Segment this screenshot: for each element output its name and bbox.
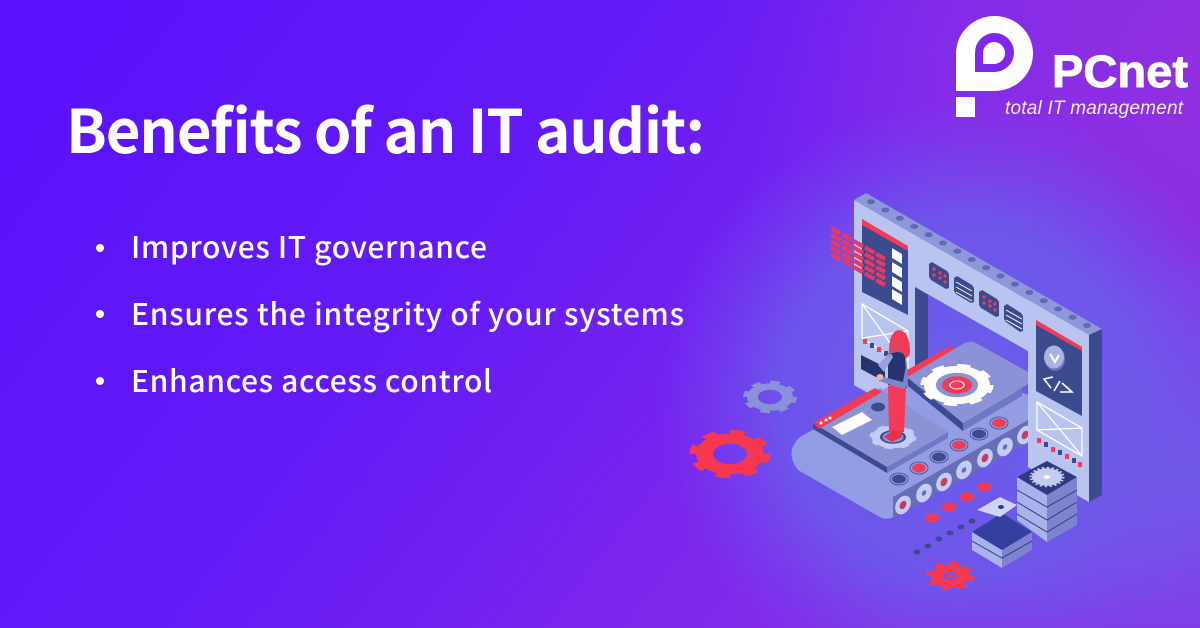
code glyph [1044, 377, 1072, 392]
bullet: ensures integrity: Ensures the integrity of your systems [131, 290, 684, 334]
panel white keys [892, 248, 902, 305]
gear: red large [694, 432, 766, 476]
module: red dots A [929, 262, 949, 289]
illustration: IT audit machine [694, 193, 1102, 589]
opening inner wall [915, 287, 928, 368]
platform: large gear [907, 342, 1028, 431]
frame rivets [867, 199, 1091, 328]
face [890, 339, 902, 353]
logo tagline: total IT management [1005, 98, 1184, 119]
right arm [879, 360, 908, 389]
white gear [924, 366, 990, 404]
shoes [884, 431, 902, 442]
hand [876, 374, 884, 380]
navy path dots [914, 518, 976, 554]
white screen block [832, 412, 872, 435]
bullet: enhances access control: Enhances access control [131, 357, 492, 401]
left status dots [863, 339, 888, 356]
left control panel [862, 219, 908, 315]
module: lines A [954, 276, 974, 303]
frame top face [854, 193, 1102, 335]
left arm [878, 352, 893, 372]
code panel [1036, 320, 1082, 416]
conveyor belt [791, 360, 1036, 519]
gantry frame [831, 193, 1102, 502]
logo: PCnet [956, 16, 1188, 119]
floor gear [872, 426, 914, 448]
bullet: improves IT governance: Improves IT governance [131, 223, 487, 267]
gear: red small [929, 563, 971, 589]
window dots [820, 416, 832, 424]
belt side strip [893, 420, 1028, 518]
chip on server [977, 497, 1017, 517]
V badge [1044, 346, 1065, 371]
holographic red data grid [831, 228, 885, 285]
server stack: tall [1017, 461, 1077, 542]
belt surface [791, 360, 1028, 519]
logo mark [956, 16, 1033, 117]
red path dots [925, 482, 991, 522]
right wireframe card [1037, 402, 1082, 456]
logo wordmark: PCnet [1052, 46, 1188, 97]
server top gear [1031, 468, 1063, 486]
legs [888, 386, 906, 432]
right column with code panel [1028, 300, 1102, 502]
frame front face [854, 200, 1089, 502]
module: red dots B [979, 290, 999, 317]
person with tablet [861, 330, 910, 442]
torso [888, 351, 907, 388]
left wireframe card [862, 304, 908, 368]
bullet list [96, 223, 684, 401]
module: lines B [1004, 304, 1023, 332]
server stack: short [972, 497, 1032, 568]
small disc [871, 402, 885, 412]
belt discs [890, 417, 1008, 485]
right status dots [1037, 438, 1082, 467]
belt rollers [892, 423, 1036, 517]
title: Benefits of an IT audit: [66, 84, 705, 171]
hair [889, 330, 910, 358]
gear: grey floating [746, 383, 794, 411]
tablet [861, 355, 885, 382]
platform: window card [813, 388, 948, 473]
